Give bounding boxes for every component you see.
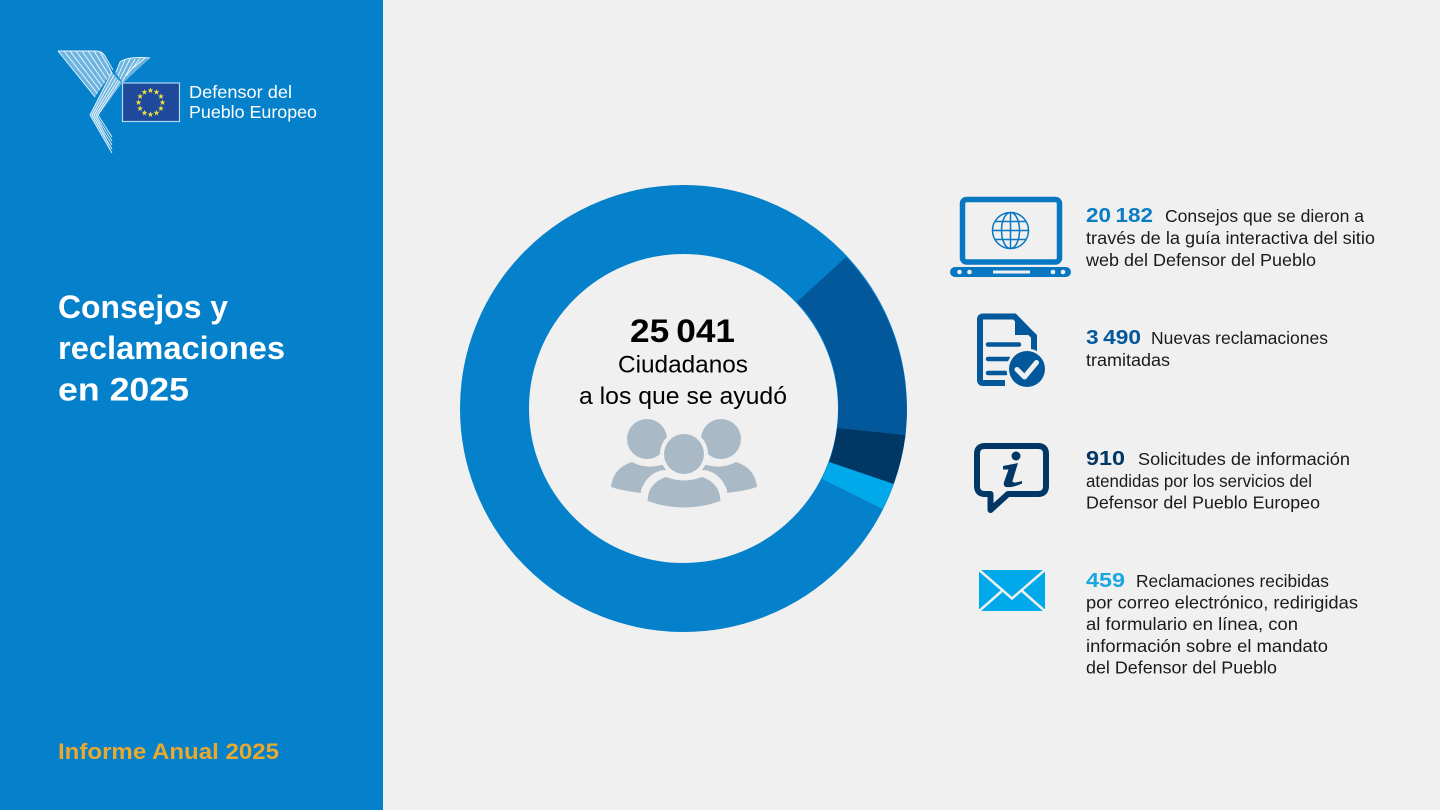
text block: emails: información sobre el mandato [1086, 636, 1328, 656]
text block: web guide advice [1085, 205, 1375, 270]
logo text: Defensor del [189, 82, 292, 102]
text block: web guide advice: través de la guía interactiva del sitio [1086, 228, 1375, 248]
icon: envelope [978, 569, 1046, 612]
segment: web guide [494, 220, 872, 598]
title: reclamaciones [58, 330, 285, 366]
text block: web guide advice: Consejos que se dieron a [1165, 206, 1364, 226]
segment: emails [822, 462, 894, 509]
donut centre total: 25 041 [630, 313, 735, 349]
text block: emails: al formulario en línea, con [1086, 614, 1298, 634]
text block: information requests [1086, 448, 1350, 512]
text block: web guide advice: 20 182 [1086, 205, 1153, 227]
logo text [189, 82, 317, 122]
text block: web guide advice: web del Defensor del Pueblo [1085, 250, 1316, 270]
footer: report name: Informe Anual 2025 [58, 739, 279, 764]
EU flag [122, 83, 180, 122]
text block: information requests: Solicitudes de información [1138, 449, 1350, 469]
text block: emails: del Defensor del Pueblo [1086, 658, 1277, 678]
donut centre total [579, 313, 787, 410]
text block: new complaints: 3 490 [1086, 327, 1141, 349]
text block: new complaints: Nuevas reclamaciones [1151, 328, 1328, 348]
text block: new complaints [1086, 327, 1328, 370]
segment: new complaints [797, 257, 907, 435]
text block: information requests: atendidas por los servicios del [1086, 471, 1312, 491]
donut centre total: Ciudadanos [618, 352, 748, 378]
logo wing stripes [58, 51, 150, 153]
logo wing shapes [58, 51, 150, 153]
logo: European Ombudsman [58, 51, 317, 153]
text block: information requests: 910 [1086, 448, 1125, 470]
donut chart [494, 220, 907, 598]
donut centre total: a los que se ayudó [579, 383, 787, 410]
text block: emails: Reclamaciones recibidas [1136, 571, 1329, 591]
icon: info speech bubble [977, 446, 1046, 510]
text block: information requests: Defensor del Pueblo Europeo [1086, 492, 1320, 512]
text block: new complaints: tramitadas [1086, 350, 1170, 370]
panel: left sidebar [0, 0, 383, 810]
segment: information requests [829, 428, 906, 484]
title: Consejos y [58, 289, 228, 325]
icon: laptop with globe [950, 200, 1071, 277]
title [58, 289, 285, 408]
text block: emails: por correo electrónico, redirigidas [1086, 592, 1358, 612]
text block: emails [1086, 570, 1358, 678]
text block: emails: 459 [1086, 570, 1125, 592]
title: en 2025 [58, 372, 189, 408]
icon: document with check [980, 316, 1048, 390]
logo text: Pueblo Europeo [189, 102, 317, 122]
icon: people [611, 419, 757, 508]
